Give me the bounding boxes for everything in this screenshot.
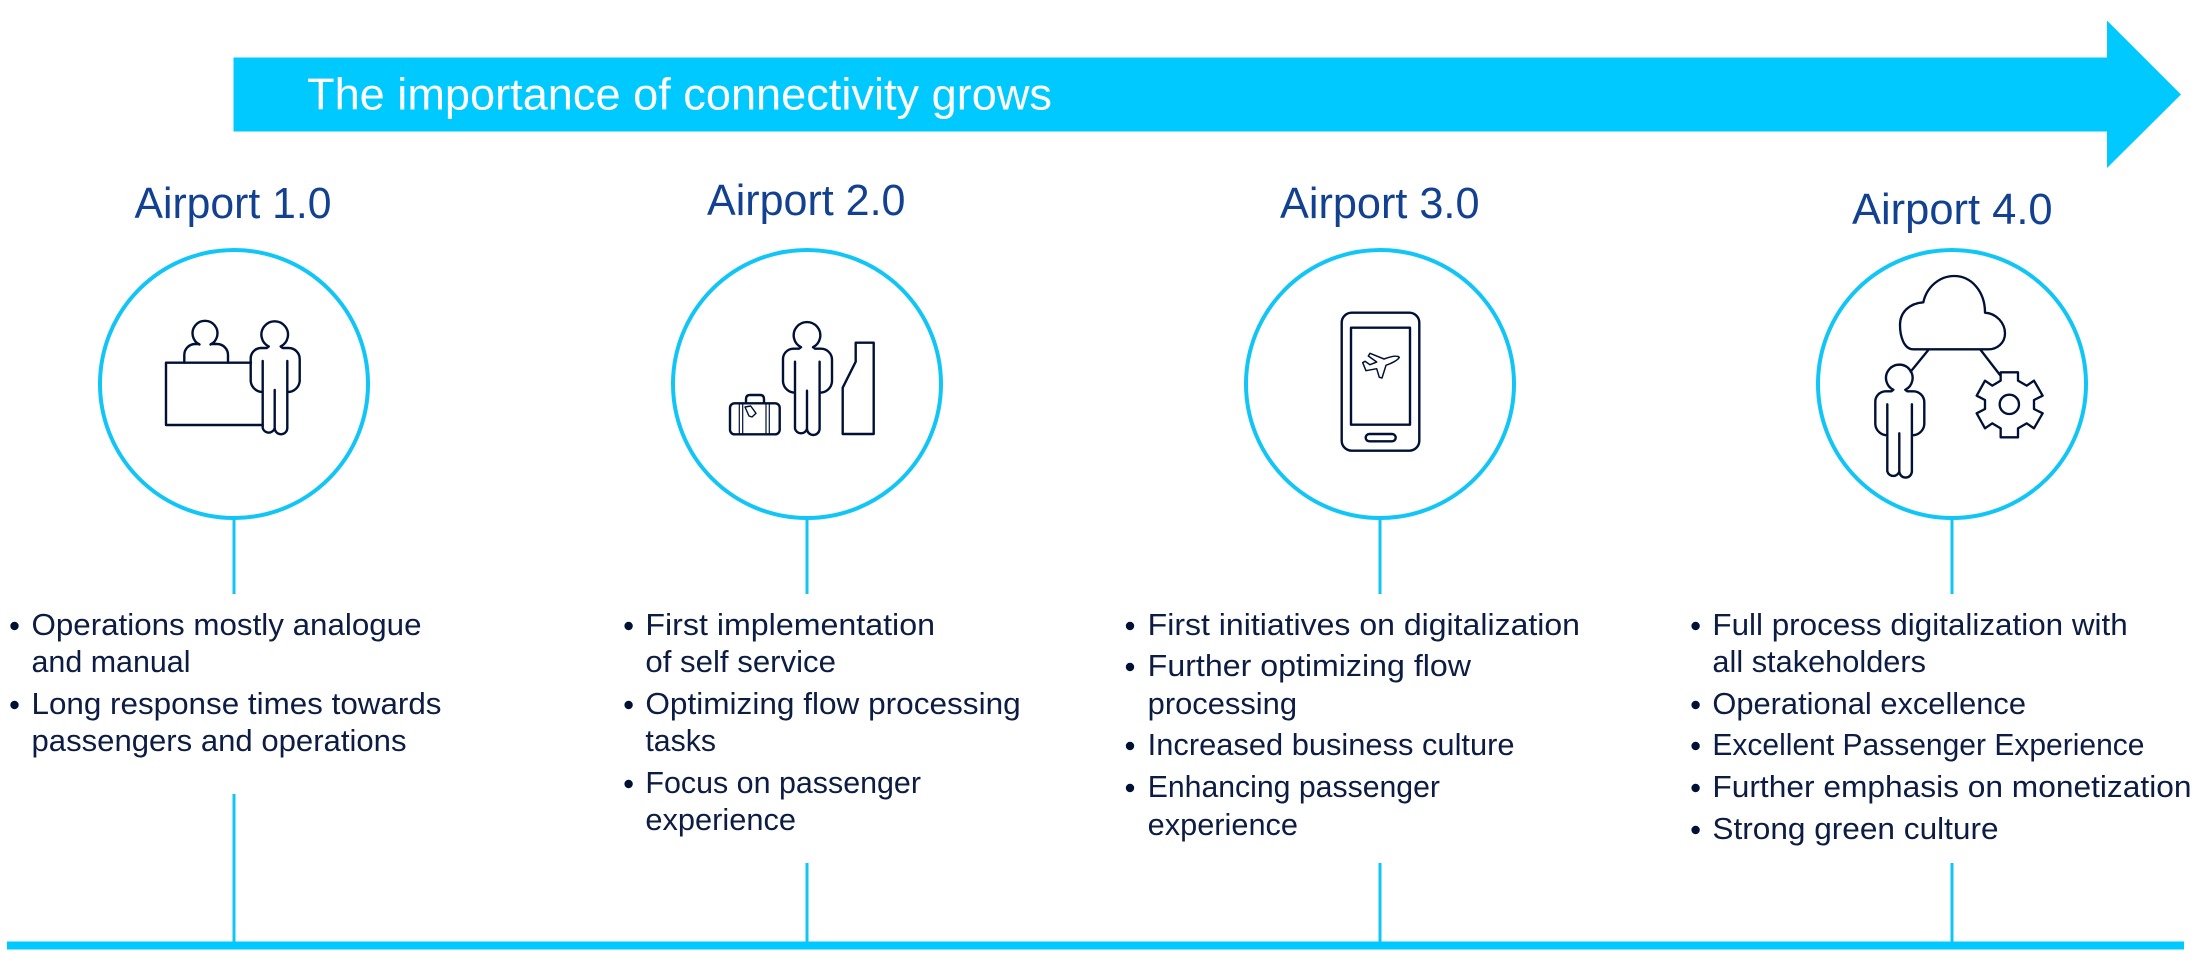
bullet list 3.0: Enhancing passenger: [1148, 770, 1440, 804]
bullet list 1.0: Operations mostly analogue: [32, 608, 422, 642]
heading: Airport 4.0: Airport 4.0: [1852, 186, 2053, 234]
bullet list 3.0: experience: [1148, 808, 1298, 842]
bullet list 4.0: Operational excellence: [1712, 687, 2026, 721]
bullet list 1.0: Long response times towards: [32, 687, 442, 721]
bullet list 3.0: [1126, 608, 1580, 842]
icon: cloud linked to person and gear: [1875, 276, 2043, 478]
connector lines 3.0: [1378, 518, 1382, 943]
bullet list 2.0: tasks: [645, 724, 716, 758]
circle 3.0: [1246, 250, 1514, 518]
bullet list 2.0: Focus on passenger: [645, 766, 921, 800]
bullet list 1.0: [10, 608, 442, 758]
connector lines 1.0: [232, 518, 236, 943]
bullet list 4.0: all stakeholders: [1712, 645, 1926, 679]
bullet list 1.0: passengers and operations: [32, 724, 406, 758]
bullet list 3.0: processing: [1148, 687, 1297, 721]
connector lines 2.0: [806, 518, 808, 943]
bullet list 2.0: of self service: [645, 645, 836, 679]
bullet list 4.0: [1691, 608, 2192, 846]
bullet list 4.0: Further emphasis on monetization: [1712, 770, 2192, 804]
arrow banner: the importance of connectivity grows: [234, 20, 2181, 168]
circle 1.0: [100, 250, 368, 518]
panel: Airport 4.0: [1691, 186, 2192, 943]
circle 2.0: [673, 250, 941, 518]
timeline baseline: [7, 942, 2184, 950]
bullet list 2.0: [624, 608, 1021, 837]
heading: Airport 1.0: Airport 1.0: [134, 180, 332, 228]
bullet list 2.0: Optimizing flow processing: [645, 687, 1021, 721]
bullet list 3.0: Increased business culture: [1148, 728, 1515, 762]
connector lines 4.0: [1950, 518, 1954, 943]
icon: check-in desk with two people: [166, 321, 300, 434]
bullet list 3.0: First initiatives on digitalization: [1148, 608, 1580, 642]
heading: Airport 3.0: Airport 3.0: [1280, 180, 1480, 228]
bullet list 4.0: Strong green culture: [1712, 812, 1999, 846]
panel: Airport 2.0: [624, 177, 1021, 943]
bullet list 4.0: Excellent Passenger Experience: [1712, 728, 2144, 762]
icon: smartphone with airplane: [1342, 313, 1419, 451]
arrow banner: the importance of connectivity grows: The importance of connectivity grows: [307, 70, 1052, 120]
panel: Airport 1.0: [10, 180, 442, 943]
circle 4.0: [1818, 250, 2086, 518]
bullet list 1.0: and manual: [32, 645, 190, 679]
icon: passenger with suitcase and kiosk: [730, 322, 874, 435]
bullet list 2.0: experience: [645, 803, 796, 837]
bullet list 3.0: Further optimizing flow: [1148, 649, 1472, 683]
bullet list 2.0: First implementation: [645, 608, 935, 642]
heading: Airport 2.0: Airport 2.0: [707, 177, 906, 225]
panel: Airport 3.0: [1126, 180, 1580, 943]
bullet list 4.0: Full process digitalization with: [1712, 608, 2128, 642]
